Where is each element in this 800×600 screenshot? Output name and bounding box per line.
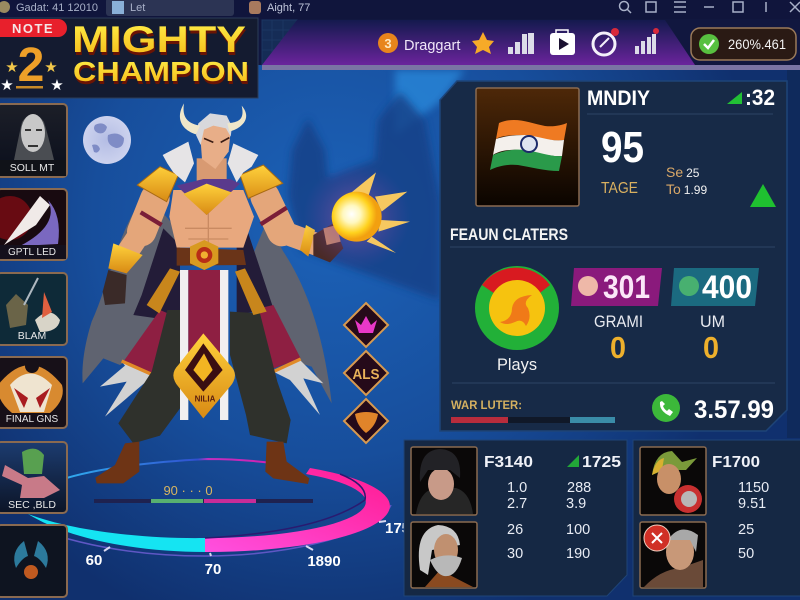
card: emblem [0, 525, 67, 597]
score pill [691, 28, 796, 60]
stats table: 2.7 [507, 496, 527, 512]
flag: white band [493, 135, 564, 156]
panel frame [440, 81, 787, 431]
ring: inner shadow line [205, 474, 365, 538]
portrait: green-hat hero [640, 447, 706, 515]
rank stars: ★ [0, 77, 14, 94]
title panel [0, 18, 258, 98]
ring: tick marks [104, 521, 386, 556]
stats table: 3.9 [566, 496, 586, 512]
label: UM: UM [700, 312, 725, 331]
value: UM 0: 0 [703, 330, 719, 365]
sidebar cards [0, 104, 67, 597]
rank stars: ★ [50, 77, 64, 94]
title: CHAMPION: CHAMPION [73, 56, 249, 87]
flag: saffron band [496, 120, 567, 140]
stats table: 26 [507, 522, 523, 538]
label: WAR LUTER: WAR LUTER: [451, 398, 522, 412]
value: GRAMI 0: 0 [610, 330, 626, 365]
hero: collar [177, 179, 240, 215]
card: GPTL LED: GPTL LED [8, 247, 56, 258]
tab: Let: Let [130, 2, 145, 14]
hero: gold emblem: NILIA [195, 395, 216, 404]
name: MNDIY [587, 87, 650, 110]
stats table [507, 480, 591, 562]
ribbon background [262, 20, 695, 65]
portrait: white-bearded hero [411, 522, 477, 588]
hero: belt [177, 248, 246, 266]
stats table: 190 [566, 546, 590, 562]
skill badge: ALS [344, 351, 388, 395]
side strip right [787, 70, 800, 438]
hero: right fist [313, 223, 343, 262]
badge: 3: 3 [384, 36, 392, 51]
tab: Let [106, 0, 234, 16]
rank stars: ★ [5, 59, 19, 76]
stat: To: To1.99 [666, 181, 707, 197]
hero: left bracer [108, 243, 143, 273]
card: SEC BLD: SEC ,BLD [8, 499, 56, 511]
icon: dial [593, 28, 619, 55]
bottom panel: left roster [404, 440, 627, 596]
hero: cape [82, 195, 332, 403]
stats table: 50 [738, 546, 754, 562]
portrait: grey-haired hero [640, 522, 706, 588]
time delta [727, 85, 775, 110]
hero: torso [169, 190, 254, 248]
stat: Se: Se25 [666, 164, 700, 180]
card: FINAL GNS: FINAL GNS [6, 414, 59, 425]
rank number: 2 [18, 39, 44, 92]
hero: fur collar [163, 142, 258, 182]
stats table: 100 [566, 522, 590, 538]
flag card [476, 88, 579, 206]
trend triangle [750, 184, 776, 207]
time delta: :32 [745, 85, 775, 110]
badge: 3 [378, 33, 398, 53]
ring: tick labels: 60 [86, 552, 102, 569]
heading: FEAUN CLATERS [450, 225, 568, 244]
ring: magenta segment [205, 468, 390, 552]
castle silhouette [288, 92, 440, 300]
war bar [451, 417, 615, 423]
hero: belt buckle [190, 240, 218, 270]
hero: waist cloth [180, 270, 228, 420]
hero: right bracer [300, 225, 315, 257]
hero: boots [95, 442, 309, 484]
hero: energy glow [303, 163, 410, 270]
hero: arm bands [141, 208, 287, 225]
icon: green check [699, 34, 719, 54]
progress bar [94, 483, 313, 503]
skill badge: heart [344, 399, 388, 443]
hero: gold emblem [173, 333, 235, 418]
title: CHAMPION: CHAMPION [74, 59, 250, 90]
stats table: 288 [567, 480, 591, 496]
delta: 1725 [567, 454, 621, 471]
tab: Aight: Aight, 77 [267, 2, 310, 14]
rank stars [0, 59, 64, 94]
NOTE pill [0, 19, 67, 37]
card: BLAM [0, 273, 67, 345]
ring: tick labels: 70 [205, 561, 221, 578]
title: MIGHTY: MIGHTY [73, 22, 247, 63]
label: Draggart: Draggart [404, 38, 460, 54]
hero: tassets [147, 268, 267, 315]
hero: sun spikes [348, 172, 410, 253]
ribbon grid corner [262, 20, 297, 65]
name: F1700: F1700 [712, 454, 760, 471]
stats table: 9.51 [738, 496, 766, 512]
tab: Aight [249, 1, 310, 14]
hero: neck [197, 158, 227, 185]
donut chart [475, 266, 559, 350]
progress bar: 90 · · · 0 [163, 483, 213, 498]
hero: fist knuckles [323, 225, 341, 245]
icon: bars [508, 33, 534, 54]
ring: outer line [34, 505, 391, 556]
delta: 1725: 1725 [582, 454, 621, 471]
portrait: dark-haired hero [411, 447, 477, 515]
NOTE pill: NOTE [12, 21, 54, 36]
value: phone stat: 3.57.99 [694, 396, 774, 424]
ring: tick labels: 1890 [307, 553, 341, 570]
hero: horns [180, 103, 246, 134]
label: TAGE: TAGE [601, 180, 638, 197]
skill badge: pink crest [344, 303, 388, 347]
bottom panel: right roster [633, 440, 800, 596]
chip: 400 [671, 268, 759, 306]
hero: left hand [103, 270, 127, 305]
label: GRAMI: GRAMI [594, 312, 643, 331]
top nav ribbon [258, 19, 800, 70]
icon: signal bars [635, 28, 659, 54]
hero: hair [196, 113, 232, 145]
card: SEC BLD [0, 442, 67, 513]
hero: energy orb [332, 192, 382, 242]
ring: tick labels [86, 520, 410, 578]
score 95: 95 [601, 123, 644, 172]
chip: 301: 301 [603, 269, 650, 305]
icon: star [472, 32, 494, 54]
light wedge [395, 70, 465, 135]
rank stars: ★ [44, 59, 58, 76]
ring: thin top arc [60, 459, 272, 480]
window controls [620, 2, 800, 13]
tab: Gadat: Gadat: 41 12010 [16, 2, 98, 14]
icon: play tile [550, 30, 575, 55]
chip: 400: 400 [702, 269, 752, 305]
hero: orange hems [122, 359, 301, 374]
hero: arms [127, 197, 318, 253]
hero character [82, 103, 410, 484]
icon: phone [652, 394, 680, 422]
hero: legs [118, 310, 291, 443]
stats table: 1.0 [507, 480, 527, 496]
stats table: 25 [738, 522, 754, 538]
hero: chest plate [183, 184, 232, 215]
ribbon base strip [262, 65, 800, 70]
hero: skirt trim and tips [100, 360, 323, 417]
stats table: 30 [507, 546, 523, 562]
ring: cyan segment [28, 514, 205, 552]
hero: shoulder armor [137, 165, 283, 202]
title: MIGHTY: MIGHTY [72, 19, 246, 60]
stats table [738, 480, 769, 562]
hero: inner cape [133, 228, 273, 322]
chip: 301 [571, 268, 662, 306]
label: Plays: Plays [497, 355, 537, 374]
pill value: 260%.461 [728, 37, 786, 52]
moon [83, 116, 131, 164]
hero: abs [185, 213, 232, 247]
name: F3140: F3140 [484, 454, 533, 471]
flag: chakra [521, 136, 537, 152]
flag: green band [490, 150, 562, 171]
hero: red skirt [123, 305, 301, 378]
ribbon backdrop [258, 19, 800, 65]
card: SOLL MT: SOLL MT [10, 162, 55, 174]
hero: eyes [204, 138, 229, 142]
card: BLAM: BLAM [18, 330, 46, 342]
ring: tick labels: 175 [385, 520, 410, 537]
hero: face [199, 123, 231, 169]
stats panel [440, 81, 787, 431]
card: SOLL MT [0, 104, 67, 177]
card: GPTL LED [0, 189, 67, 260]
platform ring [28, 459, 410, 578]
skill badge: ALS: ALS [352, 366, 380, 383]
top title bar [0, 0, 800, 19]
card: FINAL GNS [0, 357, 67, 428]
stats table: 1150 [738, 480, 769, 496]
